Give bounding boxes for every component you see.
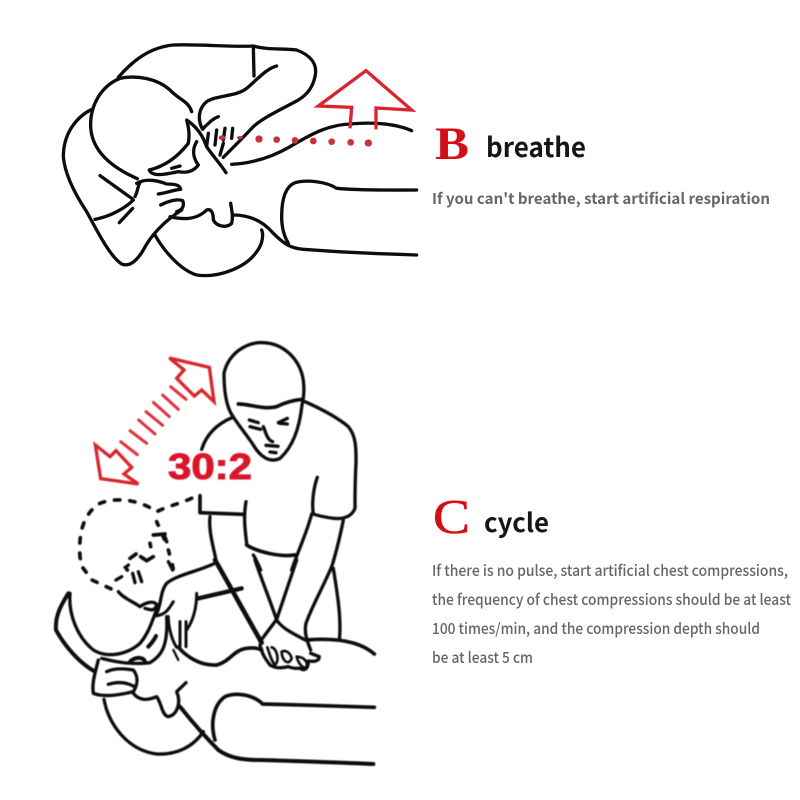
icon: red up arrow: [318, 71, 412, 129]
text: B description: If you can't breathe, start artificial respiration: [432, 188, 770, 209]
patient and rescuer arms: [56, 560, 374, 764]
text: C description: [432, 560, 791, 668]
dotted breath line: [219, 135, 372, 147]
heading: C cycle: cycle: [484, 503, 549, 540]
heading: B breathe: breathe: [486, 126, 586, 165]
text: C description: be at least 5 cm: [432, 647, 533, 668]
panel: B breathe illustration: [63, 45, 417, 276]
heading: B breathe: [435, 118, 586, 170]
dashed head position: [80, 498, 192, 592]
panel: C cycle illustration: [56, 343, 374, 764]
rescuer outline: [63, 45, 417, 276]
label: 30:2 ratio: 30:2: [168, 446, 252, 487]
text: C description: 100 times/min, and the compression depth should: [432, 618, 760, 639]
heading: C cycle: [433, 489, 549, 544]
heading: B breathe: B: [435, 118, 469, 170]
heading: C cycle: C: [433, 489, 470, 544]
rescuer upper body: [200, 343, 356, 570]
icon: red double arrow: [95, 358, 214, 484]
